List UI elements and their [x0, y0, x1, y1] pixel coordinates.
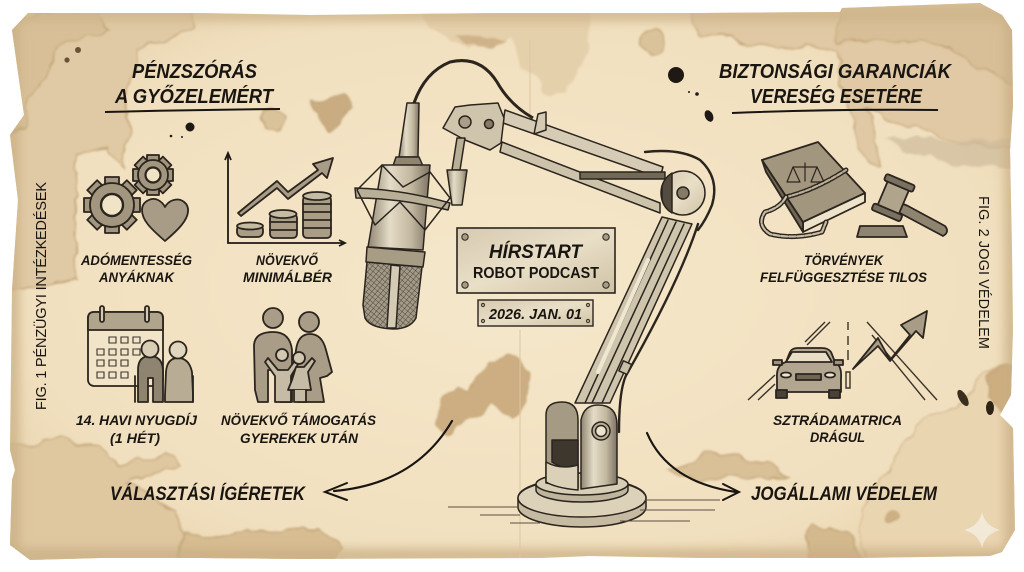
- label: 14. HAVI NYUGDÍJ: [76, 412, 198, 428]
- ink splatters: [64, 47, 715, 138]
- item: growing minimum wage: [225, 153, 345, 285]
- label: DRÁGUL: [810, 429, 865, 445]
- item: tax exemption for mothers: [80, 155, 192, 285]
- right title: [719, 60, 952, 113]
- icon: coin chart: [225, 153, 345, 246]
- label: [773, 412, 902, 445]
- item: suspension of laws forbidden: [760, 142, 947, 285]
- label: MINIMÁLBÉR: [243, 269, 333, 285]
- label: ANYÁKNAK: [98, 269, 175, 285]
- label: FELFÜGGESZTÉSE TILOS: [760, 269, 928, 285]
- label: NÖVEKVŐ: [256, 251, 318, 268]
- nameplate: [457, 228, 615, 293]
- label: NÖVEKVŐ TÁMOGATÁS: [221, 411, 377, 428]
- base: [518, 402, 646, 527]
- label: GYEREKEK UTÁN: [240, 430, 359, 446]
- icon: calendar and elderly couple: [88, 306, 193, 402]
- label: [76, 412, 198, 446]
- icon: sparkle watermark: [964, 512, 1000, 548]
- label: (1 HÉT): [110, 430, 160, 446]
- right title: VERESÉG ESETÉRE: [750, 85, 923, 108]
- label: [243, 251, 333, 285]
- item: highway sticker price rises: [748, 311, 937, 445]
- microphone: [355, 103, 467, 329]
- left title: [105, 59, 280, 112]
- label: [760, 252, 928, 285]
- base shadow lines: [448, 500, 720, 523]
- heading: rule of law protection: JOGÁLLAMI VÉDELEM: [751, 483, 938, 505]
- vertical figure label left: FIG. 1 PÉNZÜGYI INTÉZKEDÉSEK: [32, 182, 50, 410]
- label: SZTRÁDAMATRICA: [773, 412, 902, 428]
- cable: [414, 61, 533, 118]
- icon: car on road with rising arrow: [748, 311, 937, 400]
- nameplate: ROBOT PODCAST: [473, 265, 599, 282]
- arrow: to election promises: [325, 421, 452, 500]
- icon: family: [254, 308, 332, 402]
- heading: election promises: VÁLASZTÁSI ÍGÉRETEK: [110, 483, 306, 505]
- icon: chained law book and gavel: [761, 142, 947, 237]
- illustration: robot microphone arm: [355, 61, 720, 527]
- label: ADÓMENTESSÉG: [80, 251, 192, 268]
- date plate: [478, 300, 593, 326]
- icon: gears and heart: [84, 155, 188, 241]
- nameplate: HÍRSTART: [489, 241, 583, 263]
- label: [80, 251, 192, 285]
- item: growing child support: [221, 308, 377, 446]
- arm: upper section: [443, 103, 714, 230]
- date plate: 2026. JAN. 01: [488, 307, 582, 323]
- label: TÖRVÉNYEK: [804, 252, 884, 268]
- vertical figure label right: FIG. 2 JOGI VÉDELEM: [975, 196, 992, 349]
- arrow: to rule of law protection: [647, 433, 739, 500]
- arm: lower section: [575, 217, 698, 432]
- right title: BIZTONSÁGI GARANCIÁK: [719, 60, 952, 83]
- left title: A GYŐZELEMÉRT: [114, 85, 275, 108]
- left title: PÉNZSZÓRÁS: [132, 59, 258, 83]
- label: [221, 411, 377, 446]
- item: 14th month pension: [76, 306, 198, 446]
